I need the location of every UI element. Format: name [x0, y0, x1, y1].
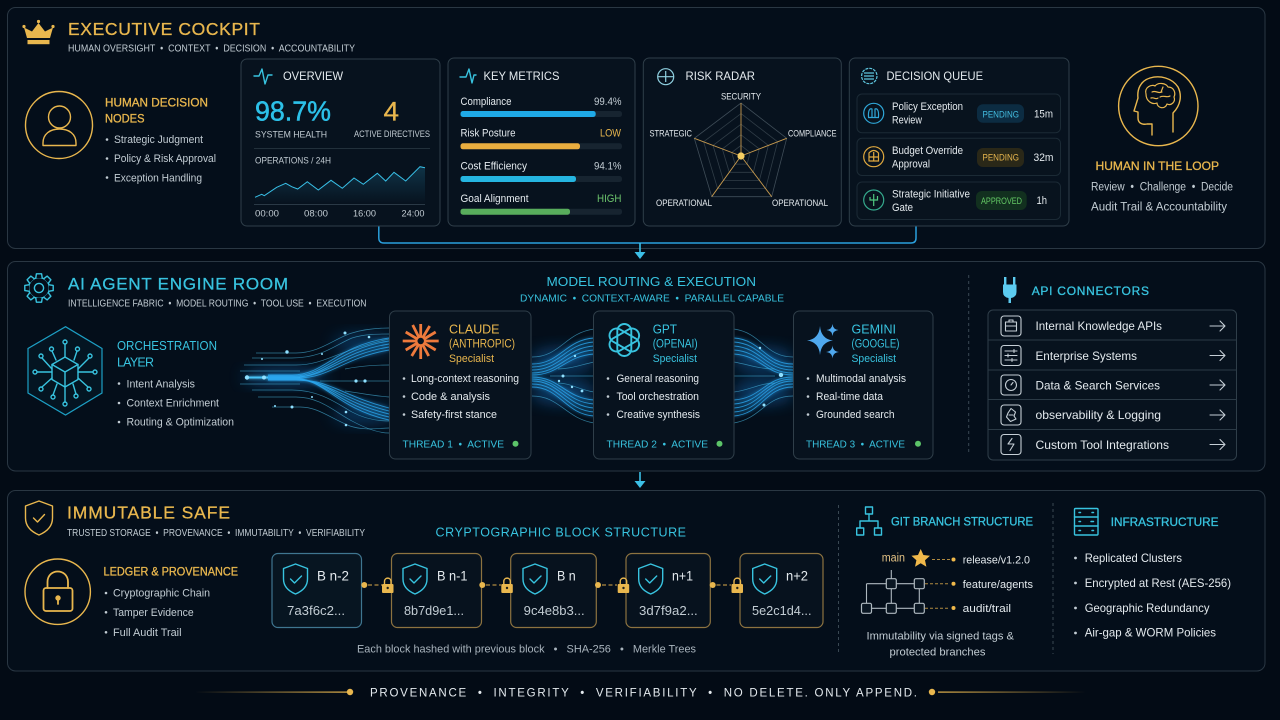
capability list: Grounded search	[816, 409, 894, 421]
icon: gemini sparkles	[807, 324, 839, 358]
queue item: strategic initiative gate: APPROVED	[981, 196, 1022, 207]
capability list: Long-context reasoning	[411, 373, 519, 385]
diagram: git branches: audit/trail	[963, 603, 1011, 615]
diagram: git branches: main	[882, 553, 905, 565]
text block: human decision nodes: HUMAN DECISION	[105, 96, 208, 110]
connector row: data and search services	[1001, 375, 1225, 395]
model title: (OPENAI)	[653, 338, 698, 350]
text block: human decision nodes: Policy & Risk Approval	[114, 153, 216, 165]
capability list: Real-time data	[816, 391, 884, 403]
card: decision queue	[849, 58, 1069, 226]
queue item: strategic initiative gate: 1h	[1036, 195, 1047, 207]
icon: openai knot	[607, 324, 642, 356]
radar chart: OPERATIONAL	[656, 198, 712, 208]
chain link 4	[710, 578, 743, 593]
queue item: budget override approval: 32m	[1034, 152, 1054, 164]
capability list: Tool orchestration	[616, 391, 699, 403]
data flow streams between models	[240, 328, 793, 433]
queue item: budget override approval: Approval	[892, 159, 930, 171]
block: n+2: n+2	[786, 569, 808, 584]
connector row: observability and logging	[1001, 405, 1225, 425]
model title	[852, 322, 900, 365]
caption: block hashing: Each block hashed with previous block • SHA-256 • Merkle Trees	[357, 643, 696, 655]
block: n+2: 5e2c1d4...	[752, 604, 812, 618]
metric bar: goal alignment: Goal Alignment	[460, 193, 528, 205]
line chart: operations per 24h: 16:00	[353, 209, 376, 220]
caption: immutability: protected branches	[890, 647, 986, 659]
queue item: budget override approval: Budget Override	[892, 145, 963, 157]
heading: model routing and execution: MODEL ROUTING & EXECUTION	[546, 274, 756, 289]
text block: orchestration layer: ORCHESTRATION	[117, 339, 217, 353]
block: b n-2	[272, 554, 362, 628]
text block: orchestration layer: LAYER	[117, 356, 154, 370]
text block: ledger and provenance: Tamper Evidence	[113, 607, 194, 619]
text block: human in the loop: Audit Trail & Accountability	[1091, 202, 1227, 214]
block: b n-2: 7a3f6c2...	[287, 604, 345, 618]
chain link 2	[479, 578, 513, 593]
text block: human decision nodes: Exception Handling	[114, 172, 202, 184]
radar chart: SECURITY	[721, 91, 761, 101]
queue item: strategic initiative gate	[857, 182, 1060, 220]
arrow: cockpit to engine room	[634, 243, 646, 259]
icon: queue	[862, 68, 877, 84]
card: risk radar	[643, 58, 841, 226]
metric bar: cost efficiency	[460, 160, 622, 182]
radar chart: OPERATIONAL	[772, 198, 828, 208]
metric bar: goal alignment	[460, 193, 622, 215]
caption: immutability	[866, 630, 1015, 659]
icon: human head with brain	[1119, 66, 1198, 146]
line chart: operations per 24h: OPERATIONS / 24H	[255, 156, 331, 166]
text block: ledger and provenance	[104, 565, 238, 639]
connector row: custom tool integrations: Custom Tool Integrations	[1036, 438, 1169, 452]
metric bar: compliance: Compliance	[460, 96, 512, 108]
line chart: operations per 24h: 24:00	[402, 209, 424, 220]
queue item: policy exception review: 15m	[1034, 109, 1053, 121]
list: infrastructure: Air-gap & WORM Policies	[1085, 626, 1216, 640]
capability list	[807, 373, 906, 421]
metric: system health	[255, 96, 331, 141]
heading: executive cockpit: EXECUTIVE COCKPIT	[68, 19, 260, 39]
model card: gemini	[794, 311, 933, 459]
icon: plug	[1003, 277, 1016, 303]
connector row: internal knowledge apis	[1001, 316, 1225, 336]
connector row: custom tool integrations	[1001, 434, 1225, 454]
list: infrastructure: Geographic Redundancy	[1085, 601, 1210, 615]
metric bar: risk posture: Risk Posture	[460, 128, 516, 140]
subheading: INTELLIGENCE FABRIC • MODEL ROUTING • TOOL USE • EXECUTION	[68, 299, 366, 310]
text block: ledger and provenance: Full Audit Trail	[113, 627, 182, 639]
capability list: General reasoning	[616, 373, 699, 385]
block: b n: B n	[557, 569, 576, 584]
metric: system health: 98.7%	[255, 96, 331, 127]
model title: Specialist	[852, 353, 896, 365]
model title: (GOOGLE)	[852, 338, 900, 350]
icon: crown	[22, 20, 55, 44]
queue item: policy exception review: Review	[892, 114, 922, 126]
thread status: THREAD 3 • ACTIVE	[806, 438, 905, 450]
model title	[653, 322, 698, 365]
block: n+1: 3d7f9a2...	[639, 604, 698, 618]
text block: human decision nodes: NODES	[105, 112, 144, 126]
block: b n	[511, 554, 596, 628]
radar chart: STRATEGIC	[650, 129, 692, 139]
model card: gpt	[594, 311, 734, 459]
queue item: budget override approval: PENDING	[982, 153, 1019, 164]
model title	[449, 322, 515, 365]
diagram: git branches: release/v1.2.0	[963, 554, 1030, 566]
metric bar: compliance: 99.4%	[594, 96, 622, 108]
subheading: HUMAN OVERSIGHT • CONTEXT • DECISION • ACCOUNTABILITY	[68, 44, 355, 55]
capability list	[607, 373, 700, 421]
heading: infrastructure: INFRASTRUCTURE	[1111, 515, 1218, 529]
capability list: Code & analysis	[411, 391, 490, 403]
text block: orchestration layer	[117, 339, 234, 429]
card: overview	[241, 59, 440, 226]
queue item: strategic initiative gate: Strategic Initiative	[892, 189, 970, 201]
metric bar: goal alignment: HIGH	[597, 193, 622, 205]
metric bar: compliance	[460, 96, 622, 117]
thread status: THREAD 1 • ACTIVE	[402, 438, 504, 450]
model title: GEMINI	[852, 322, 896, 336]
icon: orchestration hexagon with cube	[28, 327, 102, 415]
capability list: Safety-first stance	[411, 409, 497, 421]
icon: claude burst	[403, 324, 439, 359]
text block: orchestration layer: Routing & Optimization	[126, 417, 234, 429]
metric: active directives: ACTIVE DIRECTIVES	[354, 129, 430, 139]
text block: human decision nodes: Strategic Judgment	[114, 134, 204, 146]
thread status: THREAD 2 • ACTIVE	[606, 438, 708, 450]
connector row: enterprise systems	[1001, 346, 1225, 366]
text block: orchestration layer: Context Enrichment	[126, 398, 220, 410]
queue item: budget override approval	[857, 138, 1060, 176]
connector row: observability and logging: observability & Logging	[1036, 408, 1161, 422]
icon: padlock in circle	[25, 559, 90, 624]
icon: shield check	[26, 501, 52, 535]
block: n+1	[626, 554, 710, 628]
caption: immutability: Immutability via signed tags &	[866, 630, 1015, 642]
model title: Specialist	[449, 353, 494, 365]
model title: GPT	[653, 322, 677, 336]
list: api connectors	[988, 310, 1236, 460]
icon: pulse	[254, 69, 272, 84]
capability list: Creative synthesis	[616, 409, 700, 421]
metric bar: cost efficiency: Cost Efficiency	[460, 160, 527, 172]
text block: human decision nodes	[105, 96, 216, 184]
block: b n-2: B n-2	[317, 569, 349, 584]
capability list	[403, 373, 519, 421]
connector row: enterprise systems: Enterprise Systems	[1036, 349, 1137, 363]
line chart: operations per 24h: 08:00	[304, 209, 328, 220]
heading: api connectors: API CONNECTORS	[1032, 284, 1149, 298]
text block: human in the loop: Review • Challenge • Decide	[1091, 182, 1233, 194]
card title: OVERVIEW	[283, 69, 344, 83]
card title: RISK RADAR	[686, 69, 755, 83]
queue item: policy exception review: PENDING	[982, 109, 1019, 120]
chain link 1	[361, 578, 394, 593]
block: b n: 9c4e8b3...	[524, 604, 585, 618]
capability list: Multimodal analysis	[816, 373, 906, 385]
model card: claude	[390, 311, 531, 459]
heading: cryptographic block structure: CRYPTOGRAPHIC BLOCK STRUCTURE	[436, 526, 686, 540]
list: infrastructure	[1074, 551, 1231, 640]
chain link 3	[595, 578, 629, 593]
queue item: policy exception review	[857, 94, 1060, 133]
metric: active directives	[354, 97, 430, 139]
icon: pulse	[460, 69, 476, 83]
heading: model routing and execution: DYNAMIC • CONTEXT-AWARE • PARALLEL CAPABLE	[520, 294, 784, 305]
card title: KEY METRICS	[484, 69, 560, 83]
text block: ledger and provenance: Cryptographic Chain	[113, 588, 210, 600]
model title: (ANTHROPIC)	[449, 338, 515, 350]
panel: ai agent engine room	[8, 262, 1265, 471]
model title: CLAUDE	[449, 322, 500, 336]
footer tagline: PROVENANCE • INTEGRITY • VERIFIABILITY • NO DELETE. ONLY APPEND.	[370, 688, 917, 700]
icon: git hierarchy	[857, 507, 882, 535]
heading: ai agent engine room: AI AGENT ENGINE ROOM	[68, 274, 288, 293]
panel: immutable safe	[8, 490, 1265, 671]
list: infrastructure: Encrypted at Rest (AES-256)	[1085, 576, 1231, 590]
subheading: TRUSTED STORAGE • PROVENANCE • IMMUTABILITY • VERIFIABILITY	[67, 528, 365, 539]
radar chart	[650, 91, 836, 208]
line chart: operations per 24h: 00:00	[255, 209, 279, 220]
queue item: policy exception review: Policy Exception	[892, 101, 963, 113]
text block: human in the loop	[1091, 159, 1233, 214]
metric bar: cost efficiency: 94.1%	[594, 160, 622, 172]
connector row: internal knowledge apis: Internal Knowledge APIs	[1036, 319, 1162, 333]
list: infrastructure: Replicated Clusters	[1085, 551, 1182, 565]
diagram: git branches	[862, 549, 1033, 615]
text block: human in the loop: HUMAN IN THE LOOP	[1096, 159, 1219, 173]
metric bar: risk posture: LOW	[600, 128, 622, 140]
icon: server stack	[1074, 508, 1098, 535]
heading: model routing and execution	[520, 274, 784, 305]
model title: Specialist	[653, 353, 697, 365]
connector: dashboard to engine room	[379, 226, 916, 243]
diagram: git branches: feature/agents	[963, 579, 1033, 591]
icon: radar	[658, 69, 674, 85]
card: key metrics	[448, 58, 635, 226]
arrow: engine room to immutable safe	[634, 472, 646, 488]
icon: person in circle	[26, 92, 92, 158]
text block: ledger and provenance: LEDGER & PROVENANCE	[104, 565, 238, 579]
radar chart: COMPLIANCE	[788, 129, 836, 139]
icon: gear	[25, 274, 53, 302]
block: n+1: n+1	[672, 569, 693, 584]
heading: git branch structure: GIT BRANCH STRUCTURE	[891, 515, 1033, 529]
metric bar: risk posture	[460, 128, 622, 149]
connector row: data and search services: Data & Search Services	[1036, 378, 1160, 392]
queue item: strategic initiative gate: Gate	[892, 202, 913, 214]
heading: immutable safe: IMMUTABLE SAFE	[67, 502, 230, 522]
block: b n-1: 8b7d9e1...	[404, 604, 464, 618]
block: b n-1: B n-1	[437, 569, 468, 584]
card title: DECISION QUEUE	[886, 69, 983, 83]
text block: orchestration layer: Intent Analysis	[126, 378, 195, 390]
metric: system health: SYSTEM HEALTH	[255, 130, 327, 141]
footer tagline	[195, 688, 1086, 700]
line chart: operations per 24h	[254, 156, 425, 220]
panel: executive cockpit	[8, 8, 1265, 248]
metric: active directives: 4	[384, 97, 399, 127]
block: b n-1	[392, 554, 482, 628]
block: n+2	[740, 554, 823, 628]
